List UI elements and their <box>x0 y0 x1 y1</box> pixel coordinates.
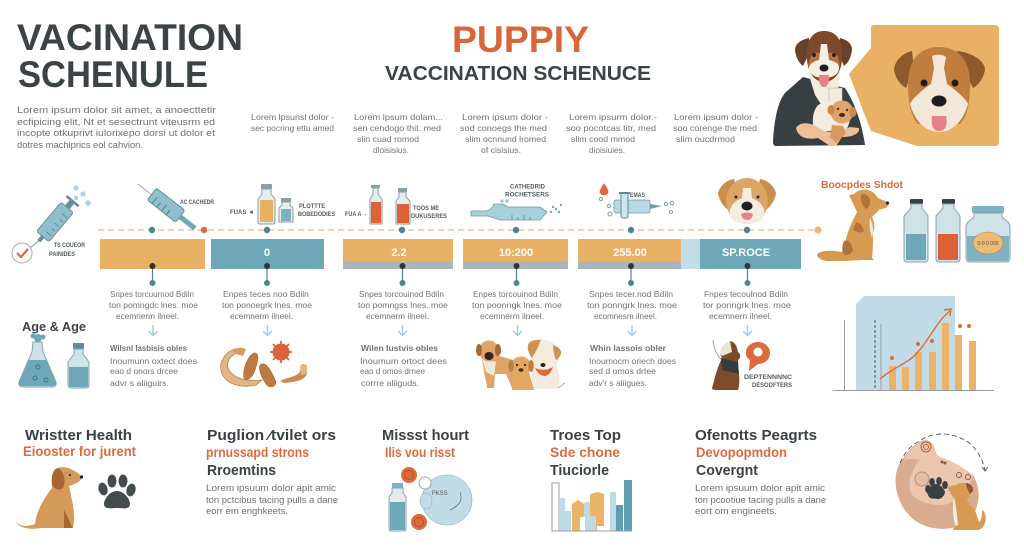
bar connectors <box>150 263 750 286</box>
top step captions: Lorem lpsum dolam... <box>354 112 443 122</box>
top step captions: dloisisius. <box>373 145 409 155</box>
icon: drop and syringe step 5: EMAS <box>630 192 646 199</box>
step descriptions: tor ponngrk lnes. moe <box>703 300 791 310</box>
panel: Puglion tvilet ors: Puglion ⁄tvilet ors <box>207 428 336 444</box>
lower description: step 5: sed d omos drtee <box>589 366 656 376</box>
panel: Wristter Health: Eiooster for jurent <box>23 444 136 459</box>
sitting dog with bottles <box>817 179 1010 262</box>
step descriptions: ton ponoegrk lnes. moe <box>222 300 312 310</box>
lower description: step 5: adv'r s aliigues. <box>589 378 647 388</box>
top step captions: Lorem ipsurm dolor.- <box>569 112 657 122</box>
top step captions: soo corenge the med <box>673 123 757 133</box>
top step captions: Lorem lpsunsl dolor - <box>251 112 334 122</box>
panel: Ofenotts Peagrts: Devopopmdon <box>696 445 787 460</box>
step descriptions: ecemnerm ilneel. <box>116 311 179 321</box>
top step captions: sen cendogo thit. med <box>353 123 441 133</box>
illustration: owner holding puppy <box>773 31 865 146</box>
panel: Troes Top: Tiuciorle <box>550 463 609 479</box>
age schedule bars: 2.2 <box>391 247 407 259</box>
lower description: step 1: Wilsnl lasbisis obles <box>110 343 187 353</box>
icon: vials step 2: BOBEDODIES <box>298 211 336 218</box>
panel: Wristter Health: Wristter Health <box>25 428 132 444</box>
step descriptions: Fnpes tecoulnod Bdiln <box>704 289 788 299</box>
lower description: step 3: Wilen lustvis obles <box>361 343 438 353</box>
step descriptions: Enpes teces noo Bdiln <box>223 289 309 299</box>
step descriptions <box>109 289 791 321</box>
lower description: step 5: Inoumocm oriech does <box>589 356 676 366</box>
illustration: dog with speech bubble: DESODFTERS <box>752 382 793 389</box>
step descriptions: ecomnesm ilneel. <box>594 311 657 321</box>
callout: dog portrait <box>849 25 999 146</box>
centre title <box>385 19 651 85</box>
icon: syringe step 1 <box>138 184 214 234</box>
illustration: paw and dog circle <box>896 434 988 530</box>
step descriptions: Snpes tecer.nod Bdiln <box>589 289 673 299</box>
illustration: dog with speech bubble <box>712 340 793 390</box>
sitting dog with bottles: Boocpdes Shdot <box>821 179 903 191</box>
main title left: SCHENULE <box>18 54 208 95</box>
step descriptions: ton pomngdc lnes. moe <box>109 300 198 310</box>
lower description: step 5: Whin lassois obler <box>590 343 667 353</box>
panel: Missst hourt: FKSS <box>432 491 448 497</box>
step descriptions: ton ponngrk lnes. moe <box>587 300 677 310</box>
step descriptions: ecemnern ilneel. <box>709 311 772 321</box>
top step captions: Lorem ipsum dolor - <box>462 112 548 122</box>
illustration: bones and virus <box>221 341 307 387</box>
icon: red vials step 3 <box>345 185 448 224</box>
icon: check mark with syringe: PAINIDES <box>49 251 76 258</box>
age schedule bars: 10:200 <box>499 247 533 259</box>
age schedule bars: SP.ROCE <box>722 247 770 259</box>
age schedule bars <box>100 239 801 269</box>
illustration: puppies <box>476 340 565 390</box>
intro text block: Lorem ipsum dolor sit amet, a anoecttetir <box>17 105 217 116</box>
lower description: step 3: corrre aliiguds. <box>361 378 419 388</box>
lower description: step 5 <box>589 343 676 388</box>
panel: Missst hourt: Ilis vou risst <box>385 445 455 460</box>
step descriptions: ton poonngk lnes. moe <box>472 300 562 310</box>
panel: Ofenotts Peagrts: Lorem ipsuum dolor apit amic <box>695 483 825 494</box>
lower description: step 1: Inoumunn oxtect does <box>110 356 197 366</box>
bar chart with trend arrow <box>833 296 994 390</box>
panel: Puglion tvilet ors: prnussapd strons <box>206 445 309 460</box>
icon: vials step 2: PLOTTTE <box>299 203 326 210</box>
icon: horizontal syringe step 4 <box>471 184 562 220</box>
lower description: step 1: advr s aliiguirs. <box>110 378 169 388</box>
panel: Troes Top: Sde chone <box>550 445 621 460</box>
panel: Troes Top: Troes Top <box>550 428 621 444</box>
panel: Ofenotts Peagrts: ton pcootiue tacing pulls a dane <box>695 495 826 506</box>
panel: Ofenotts Peagrts: Ofenotts Peagrts <box>695 428 817 444</box>
icon: horizontal syringe step 4: ROCHETSERS <box>505 192 550 198</box>
panel: Puglion tvilet ors: Rroemtins <box>207 463 276 479</box>
top step captions: sec pocring ettu amed <box>251 123 334 133</box>
top step captions: slim cood mmod <box>571 134 635 144</box>
top step captions: slim oucdrmod <box>676 134 735 144</box>
intro text block <box>17 105 217 151</box>
main title left: VACINATION <box>17 17 243 58</box>
panel: Puglion tvilet ors: Lorem ipsuum dolor apit amic <box>206 483 336 494</box>
lower description: step 3 <box>360 343 447 388</box>
icon: vials step 2 <box>230 184 336 224</box>
step descriptions: ecemnerm ilneel. <box>230 311 293 321</box>
lower description: step 1: eao d onors drcee <box>110 366 178 376</box>
panel: Missst hourt: Missst hourt <box>382 428 469 444</box>
intro text block: ecfipicing elit, Nt et sesectrunt viteusrm ed <box>17 117 215 128</box>
icon: dog face step 6 <box>718 178 776 224</box>
icon: syringe step 1: AC CACHEDR <box>180 199 214 206</box>
panel: Puglion tvilet ors <box>206 428 338 517</box>
icon: check mark with syringe: TS COUEOR <box>54 242 85 249</box>
lower description: step 3: eao d omos drnee <box>360 366 425 376</box>
top step captions: sod conoegs the med <box>460 123 547 133</box>
centre title: PUPPIY <box>452 19 589 60</box>
top step captions <box>251 112 758 155</box>
icon: red vials step 3: DUKUSERES <box>411 213 448 220</box>
top step captions: dioisiuies. <box>589 145 625 155</box>
heading: Age and Age: Age & Age <box>22 320 86 334</box>
step descriptions: ecemnerm ilneel. <box>480 311 544 321</box>
main title left <box>17 17 243 95</box>
intro text block: incopte otkuprivt iulorixepo dorsi ut dolor et <box>17 128 215 139</box>
top step captions: slim ocnnund lromed <box>465 134 546 144</box>
intro text block: dotres machiprics eol cahvion. <box>17 140 143 151</box>
panel: Ofenotts Peagrts: eort om engineets. <box>695 506 777 517</box>
age schedule bars: 255.00 <box>613 247 647 259</box>
panel: Puglion tvilet ors: eorr em enghkeets. <box>206 506 288 517</box>
panel: Ofenotts Peagrts <box>695 428 826 517</box>
step descriptions: Enpes torcouinod Bdiln <box>473 289 558 299</box>
icon: flask and bottle <box>19 334 89 388</box>
panel: Ofenotts Peagrts: Covergnt <box>696 463 758 479</box>
panel: Puglion tvilet ors: ton pctcibus tacing pulls a dane <box>206 495 338 506</box>
illustration: dog with speech bubble: DEPTENNNNC <box>744 374 792 381</box>
top step captions: soo pocotcas titr, med <box>566 123 656 133</box>
icon: horizontal syringe step 4: CATHEDRID <box>510 184 545 190</box>
panel: Troes Top <box>550 428 632 531</box>
step descriptions: Snpes torcouinod Bdiln <box>359 289 444 299</box>
step descriptions: Snpes torcuurnod Bdiln <box>110 289 194 299</box>
top step captions: of cisisius. <box>481 145 521 155</box>
panel: Missst hourt <box>382 428 472 531</box>
icon: check mark with syringe <box>12 186 91 263</box>
top step captions: Lorem ipsum dolor - <box>674 112 758 122</box>
lower description: step 1 <box>110 343 197 388</box>
step descriptions: ton pomngss lnes. moe <box>358 300 448 310</box>
icon: red vials step 3: TOOS ME <box>413 205 440 212</box>
age schedule bars: 0 <box>264 247 270 259</box>
centre title: VACCINATION SCHENUCE <box>385 62 651 85</box>
top step captions: slin cuad romod <box>357 134 419 144</box>
icon: red vials step 3: FUA A→ <box>345 211 367 218</box>
icon: vials step 2: FUAS ◄ <box>230 209 254 216</box>
sitting dog with bottles: 0-0 0 000 <box>977 241 999 247</box>
timeline dashed line <box>98 226 822 234</box>
lower description: step 3: Inoumum ortoct dees <box>360 356 447 366</box>
icon: drop and syringe step 5 <box>599 183 674 218</box>
step descriptions: ecemnerm ilneel. <box>366 311 429 321</box>
down arrows <box>148 325 752 336</box>
panel: Wristter Health <box>16 428 137 529</box>
